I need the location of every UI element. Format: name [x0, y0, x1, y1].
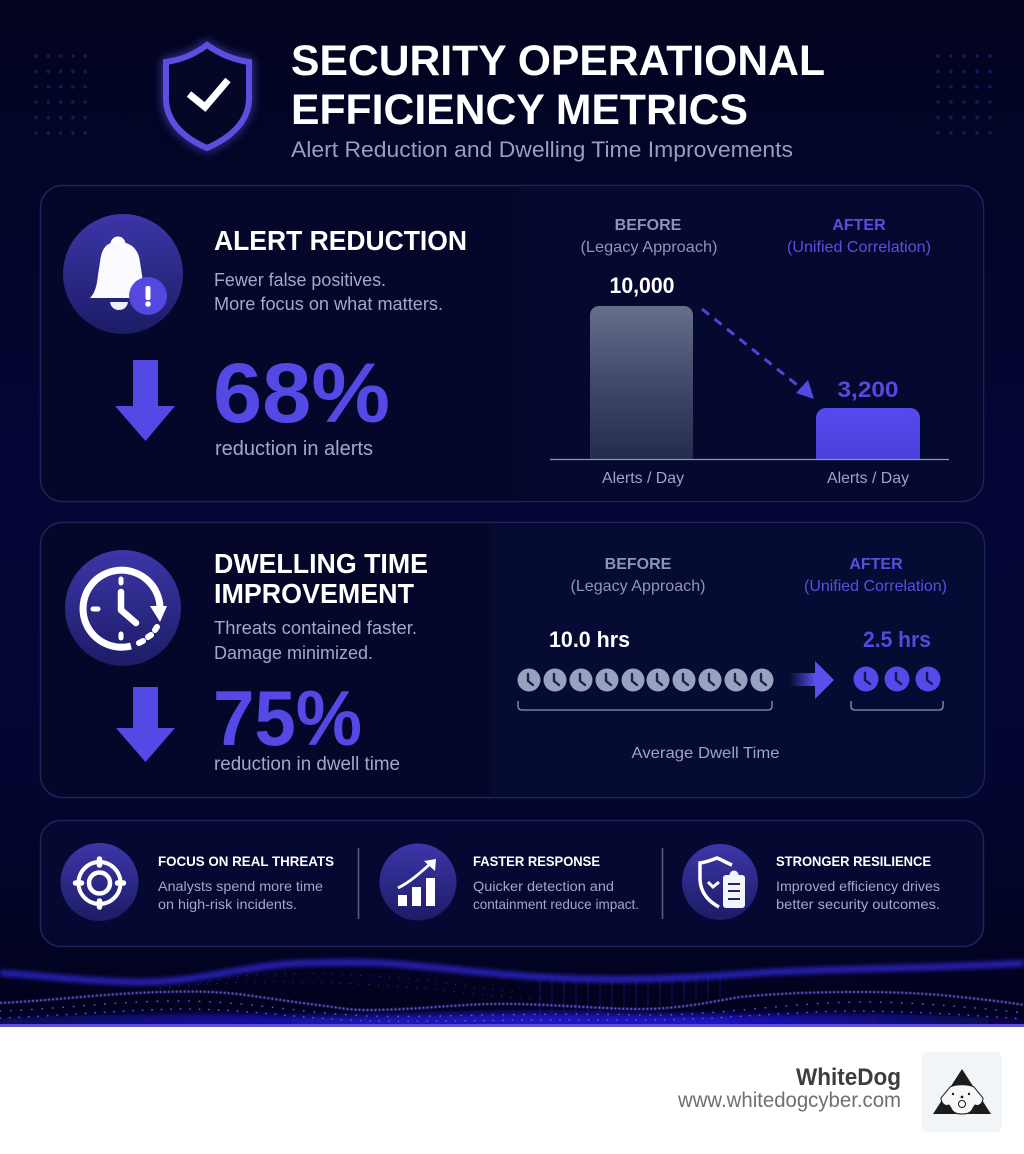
- heading: dwelling time improvement: DWELLING TIME: [214, 548, 428, 579]
- icon: bell with alert badge: [63, 214, 183, 334]
- description: alert reduction: More focus on what matters.: [214, 294, 443, 314]
- label: after: [804, 556, 947, 595]
- heading: dwelling time improvement: IMPROVEMENT: [214, 578, 414, 609]
- decorative particle wave: [0, 962, 1024, 1036]
- description: [158, 878, 323, 912]
- heading: dwelling time improvement: [214, 548, 428, 609]
- label: before: BEFORE: [605, 556, 672, 573]
- bar: after: [816, 408, 920, 460]
- arrow: dashed decrease: [702, 309, 814, 399]
- panel: alert reduction: [40, 186, 984, 502]
- description: dwelling time: [214, 618, 417, 663]
- value: 10.0 hrs: 10.0 hrs: [549, 627, 630, 652]
- label: after: (Unified Correlation): [787, 239, 931, 256]
- bar: before value: 10,000: [610, 273, 674, 298]
- label: before: [570, 556, 706, 595]
- panel: dwelling time improvement: [40, 522, 984, 798]
- description: [473, 878, 639, 912]
- title: SECURITY OPERATIONAL: [291, 37, 825, 85]
- heading: alert reduction: ALERT REDUCTION: [214, 225, 467, 256]
- description: alert reduction: Fewer false positives.: [214, 270, 386, 290]
- label: after: (Unified Correlation): [804, 578, 947, 595]
- description: [776, 878, 940, 912]
- title: [291, 37, 825, 134]
- description: Quicker detection and: [473, 878, 614, 894]
- accent bar: [0, 1024, 1024, 1027]
- axis labels: Alerts / Day: [602, 470, 684, 487]
- description: alert reduction: [214, 270, 443, 314]
- icon: clock with circular arrow: [65, 550, 181, 666]
- heading: FOCUS ON REAL THREATS: [158, 853, 334, 869]
- label: before: [580, 217, 718, 256]
- stat label: reduction in alerts: [215, 438, 373, 460]
- bracket: before: [518, 701, 772, 710]
- logo: white dog: [922, 1052, 1002, 1132]
- icon: target: [60, 843, 138, 921]
- label: after: AFTER: [849, 556, 903, 573]
- brand name: WhiteDog: [796, 1064, 901, 1091]
- title: EFFICIENCY METRICS: [291, 86, 748, 134]
- label: after: [787, 217, 931, 256]
- icon: down arrow: [115, 360, 175, 441]
- stat label: reduction in dwell time: [214, 754, 400, 775]
- clocks: after, two and a half hours: [854, 666, 940, 692]
- description: dwelling time: Threats contained faster.: [214, 618, 417, 638]
- outcome: focus on real threats: [60, 843, 334, 921]
- outcome: stronger resilience: [682, 844, 940, 920]
- icon: shield with check: [166, 45, 249, 148]
- bar chart: alerts per day: [550, 273, 949, 487]
- icon: down arrow: [116, 687, 175, 762]
- clocks: before, ten hours: [518, 668, 774, 692]
- description: dwelling time: Damage minimized.: [214, 643, 373, 663]
- caption: average dwell time: Average Dwell Time: [632, 745, 780, 762]
- stat: 75 percent: 75%: [213, 674, 362, 762]
- panel: outcomes: [40, 820, 984, 946]
- axis labels: [602, 470, 909, 487]
- footer: [0, 1027, 1024, 1154]
- description: on high-risk incidents.: [158, 896, 297, 912]
- axis labels: Alerts / Day: [827, 470, 909, 487]
- value: 2.5 hrs: 2.5 hrs: [863, 627, 931, 652]
- bar: before: [590, 306, 693, 460]
- bar: after value: 3,200: [838, 377, 898, 402]
- outcome: faster response: [380, 844, 639, 920]
- bracket: after: [851, 701, 943, 710]
- heading: STRONGER RESILIENCE: [776, 853, 931, 869]
- subtitle: Alert Reduction and Dwelling Time Improvements: [291, 137, 793, 162]
- label: before: (Legacy Approach): [580, 239, 718, 256]
- label: before: (Legacy Approach): [570, 578, 706, 595]
- icon: shield and clipboard: [682, 844, 758, 920]
- website: www.whitedogcyber.com: [677, 1089, 901, 1112]
- heading: FASTER RESPONSE: [473, 853, 600, 869]
- description: Improved efficiency drives: [776, 878, 940, 894]
- description: Analysts spend more time: [158, 878, 323, 894]
- label: before: BEFORE: [615, 217, 682, 234]
- description: better security outcomes.: [776, 896, 940, 912]
- stat: 68 percent: 68%: [213, 346, 390, 440]
- description: containment reduce impact.: [473, 896, 639, 912]
- icon: rising bars: [380, 844, 456, 920]
- label: after: AFTER: [832, 217, 886, 234]
- arrow: before to after: [790, 661, 834, 699]
